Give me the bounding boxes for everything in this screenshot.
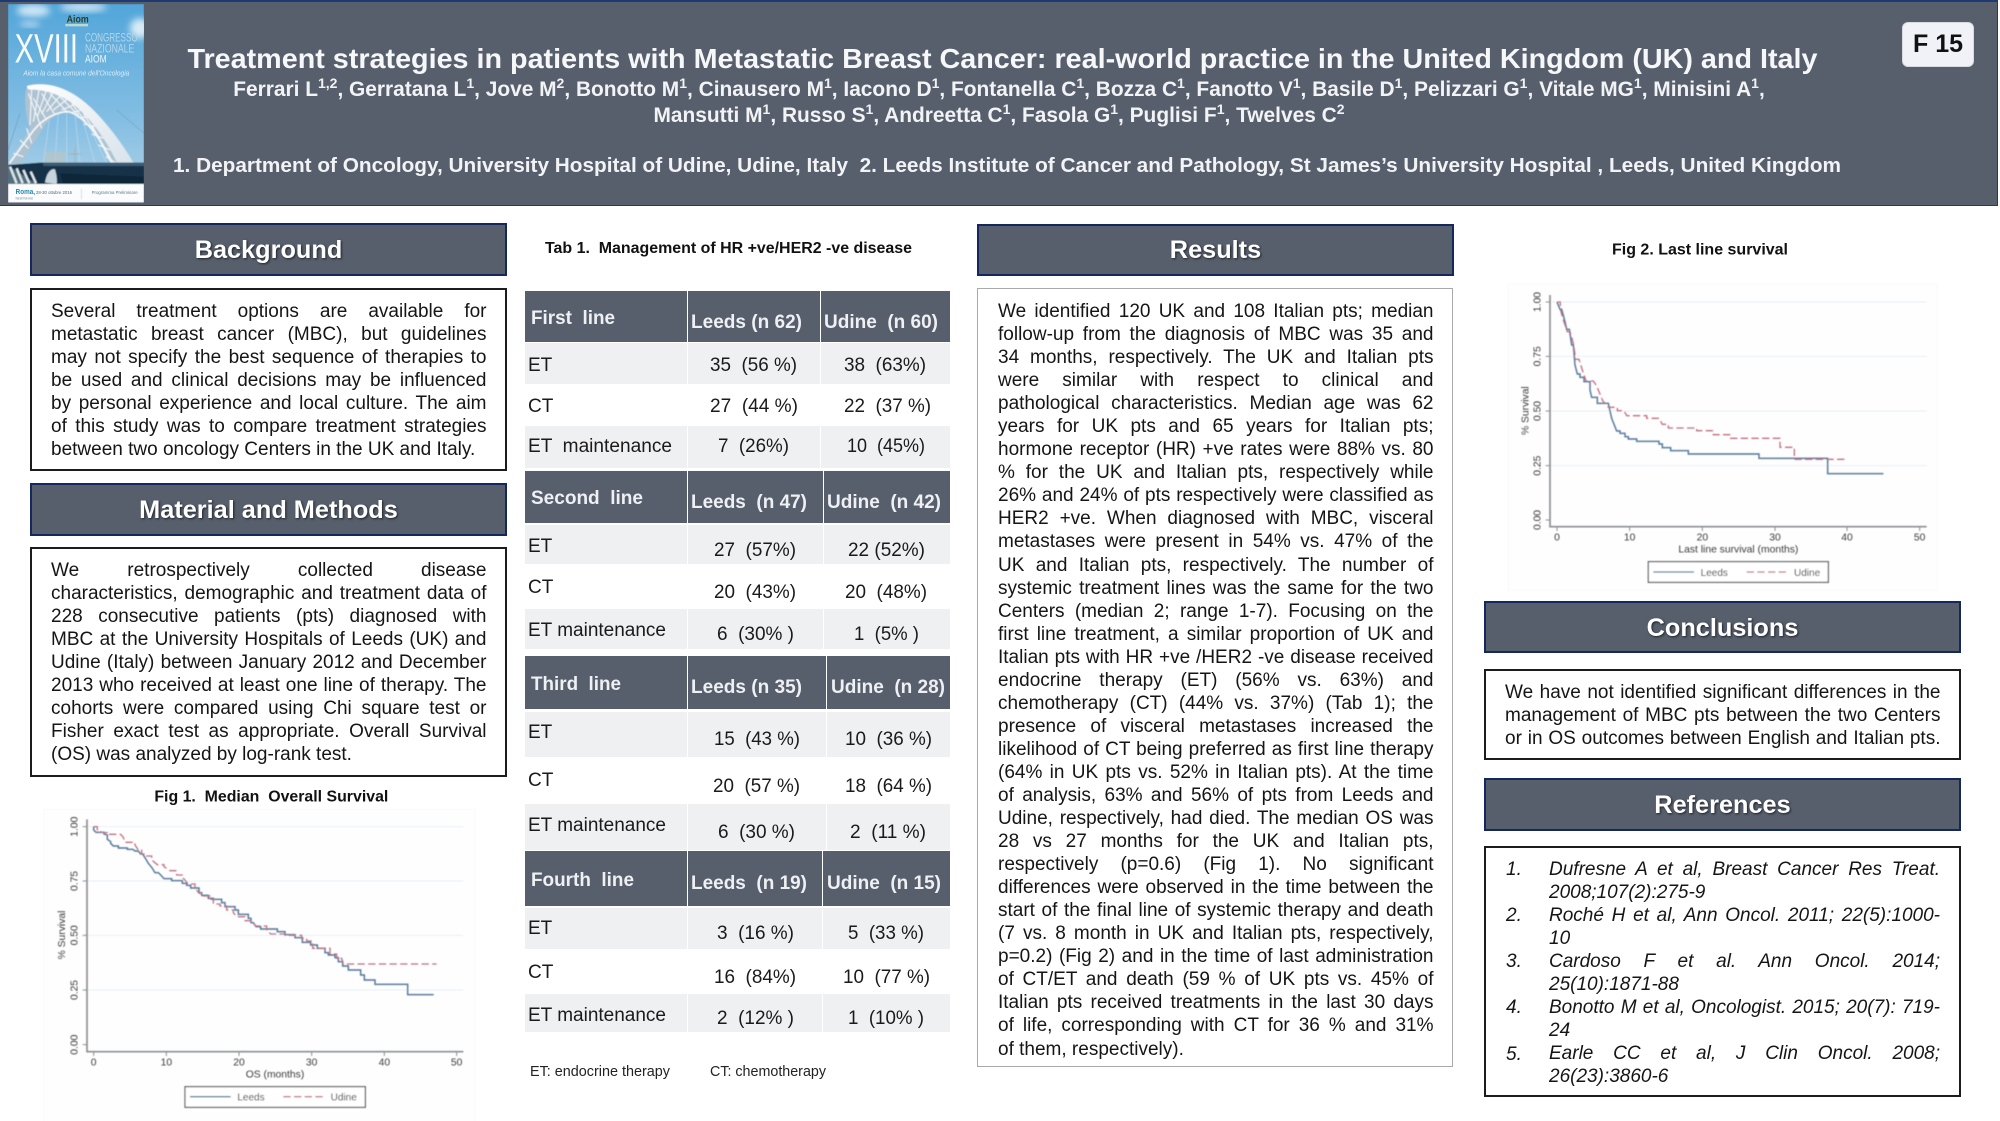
table cell values: 7 (26%)	[718, 436, 789, 457]
table footnote: CT: chemotherapy	[710, 1064, 827, 1080]
panel: methods text: MBC at the University Hospitals of Leeds (UK) and	[51, 629, 486, 650]
figure 1: overall survival chart: 1.00	[69, 816, 80, 837]
panel: references list: Earle CC et al, J Clin Oncol. 2008;	[1549, 1043, 1940, 1064]
panel: references list: Roché H et al, Ann Oncol. 2011; 22(5):1000-	[1549, 905, 1940, 926]
heading: Background	[30, 223, 507, 276]
table cell values: 15 (43 %)	[714, 729, 800, 750]
heading: Results	[977, 224, 1454, 276]
badge: F 15: F 15	[1913, 30, 1963, 58]
panel: results text: % for the UK and Italian pts, respectively while	[998, 462, 1434, 483]
cover text: 28-30 ottobre 2016	[36, 190, 73, 195]
affiliations: 1. Department of Oncology, University Hospital of Udine, Udine, Italy 2. Leeds Institute of Cancer and Pathology, St James’s University Hospital , Leeds, United Kingdom	[173, 155, 1841, 177]
panel: results text: start of the final line of systemic therapy and death	[998, 900, 1434, 921]
cover logo: Aiom	[67, 15, 89, 26]
figure 1: overall survival chart	[56, 789, 464, 1109]
cover text: AIOM	[85, 54, 107, 66]
table header labels: Udine (n 15)	[827, 873, 941, 894]
figure 1: overall survival chart: 0.75	[69, 871, 80, 891]
panel: methods text: Fisher exact test as appropriate. Overall Survival	[51, 721, 486, 742]
panel: references list: 10	[1549, 928, 1570, 949]
figure 2: last line survival chart: 0.50	[1532, 401, 1543, 421]
table header labels: Leeds (n 19)	[691, 873, 807, 894]
table cell values: 2 (12% )	[717, 1008, 794, 1029]
panel: methods text: We retrospectively collected disease	[51, 560, 486, 581]
table cell values: CT	[528, 396, 554, 417]
table cell values: 27 (57%)	[714, 540, 796, 561]
table cell values: 1 (5% )	[854, 624, 919, 645]
panel: results text: metastases were present in 54% vs. 47% of the	[998, 531, 1434, 552]
legend: figure 2	[1648, 562, 1828, 582]
panel: references list	[1484, 846, 1961, 1097]
table 1: management of HR+/HER2- disease	[525, 240, 950, 1080]
table footnote	[530, 1064, 827, 1080]
panel: methods text: characteristics, demographic and treatment data of	[51, 583, 486, 604]
panel: references list: 25(10):1871-88	[1549, 974, 1679, 995]
table cell values: 22 (52%)	[848, 540, 925, 561]
table header labels: Udine (n 28)	[831, 677, 945, 698]
table header labels: Leeds (n 35)	[691, 677, 802, 698]
heading: Material and Methods	[30, 483, 507, 536]
badge: F 15	[1902, 22, 1974, 67]
table cell values: ET	[528, 536, 553, 557]
heading: References: References	[1654, 791, 1791, 819]
panel: methods text: 228 consecutive patients (pts) diagnosed with	[51, 606, 486, 627]
table cell values: 27 (44 %)	[710, 396, 798, 417]
figure 2: last line survival chart: 0.75	[1532, 346, 1543, 366]
figure 2: last line survival chart: Last line survival (months)	[1678, 545, 1798, 556]
table header labels: Leeds (n 62)	[691, 312, 802, 333]
cover text: Marriott Park Hotel	[16, 196, 33, 200]
heading: References	[1484, 778, 1961, 831]
table cell values: 10 (45%)	[847, 436, 925, 457]
bottom strip	[8, 184, 144, 203]
table cell values: 16 (84%)	[714, 967, 796, 988]
panel: methods text: cohorts were compared using Chi square test or	[51, 698, 486, 719]
panel: results text: first line treatment, a similar proportion of UK and	[998, 624, 1434, 645]
heading: Conclusions: Conclusions	[1647, 614, 1798, 642]
panel: results text: (64% in UK pts vs. 52% in Italian pts). At the time	[998, 762, 1434, 783]
figure 2: last line survival chart: 0.25	[1532, 455, 1543, 476]
figure 2: last line survival chart: Fig 2. Last line survival	[1612, 242, 1788, 259]
panel: references list: 1.	[1506, 859, 1522, 880]
panel: results text: were similar with respect to clinical and	[998, 370, 1434, 391]
panel: results text: Italian pts received treatments in the last 30 days	[998, 992, 1434, 1013]
table cell values: ET maintenance	[528, 815, 666, 836]
panel: results text: p=0.2) (Fig 2) and in the time of last administration	[998, 946, 1434, 967]
heading: Material and Methods: Material and Methods	[139, 496, 398, 524]
table cell values: ET	[528, 355, 553, 376]
heading: Conclusions	[1484, 601, 1961, 653]
figure 1: overall survival chart: 20	[233, 1057, 245, 1068]
figure 2: last line survival chart: 20	[1697, 533, 1708, 544]
legend: figure 2: Udine	[1794, 568, 1821, 579]
panel: background text: Several treatment options are available for	[51, 301, 486, 322]
table cell values: 6 (30% )	[717, 624, 794, 645]
panel: results text: of analysis, 63% and 56% of pts from Leeds and	[998, 785, 1434, 806]
figure 2: last line survival chart: 0.00	[1532, 510, 1543, 530]
panel: results text: likelihood of CT being preferred as first line therapy	[998, 739, 1434, 760]
title: Treatment strategies in patients with Metastatic Breast Cancer: real-world practice in the United Kingdom (UK) and Italy	[188, 43, 1818, 74]
table cell values: ET maintenance	[528, 436, 672, 457]
table header labels: Udine (n 60)	[824, 312, 938, 333]
panel: conclusions text: We have not identified significant differences in the	[1505, 682, 1940, 703]
table cell values: CT	[528, 962, 554, 983]
bridge cables	[8, 110, 144, 163]
figure 1: overall survival chart: 0.50	[69, 925, 80, 945]
panel: results text: (7 vs. 8 month in UK and Italian pts, respectively,	[998, 923, 1434, 944]
heading: Results: Results	[1170, 236, 1261, 264]
figure 1: overall survival chart: 40	[379, 1057, 390, 1068]
panel: references list: Bonotto M et al, Oncologist. 2015; 20(7): 719-	[1549, 997, 1940, 1018]
legend: figure 2: Leeds	[1701, 568, 1728, 579]
table cell values: CT	[528, 770, 554, 791]
table title: Tab 1. Management of HR +ve/HER2 -ve disease	[545, 240, 912, 257]
panel: conclusions text: management of MBC pts between the two Centers	[1505, 705, 1940, 726]
panel: results text: 28 vs 27 months for the UK and Italian pts,	[998, 831, 1434, 852]
table cell values: ET maintenance	[528, 620, 666, 641]
table cell values: 6 (30 %)	[718, 822, 795, 843]
panel: results text: differences were observed in the time between the	[998, 877, 1434, 898]
panel: results text: follow-up from the diagnosis of MBC was 35 and	[998, 324, 1434, 345]
panel: results text: 26% and 24% of pts respectively were classified as	[998, 485, 1434, 506]
table header labels	[531, 308, 945, 894]
panel: methods text	[30, 547, 507, 777]
cover text: XVIII	[15, 26, 78, 72]
panel: background text: between two oncology Centers in the UK and Italy.	[51, 439, 475, 460]
panel: results text: of them, respectively).	[998, 1038, 1184, 1060]
figure 2: last line survival chart: 1.00	[1532, 292, 1543, 312]
congress cover image	[8, 4, 144, 203]
panel: results text: HER2 +ve. When diagnosed with MBC, visceral	[998, 508, 1434, 529]
cover text: Aiom la casa comune dell'Oncologia	[22, 69, 129, 78]
figure 1: overall survival chart: 0.00	[69, 1034, 80, 1055]
figure 2: last line survival chart: 40	[1841, 533, 1853, 544]
panel: results text: respectively (p=0.6) (Fig 1). No significant	[998, 854, 1434, 875]
lattice arch body	[8, 86, 123, 165]
panel: references list: 3.	[1506, 951, 1522, 972]
legend: figure 1	[185, 1087, 365, 1107]
panel: results text: endocrine therapy (ET) (56% vs. 63%) and	[998, 670, 1434, 691]
cover text: CONGRESSO	[85, 32, 138, 45]
distant city	[45, 152, 65, 163]
table cell values: 38 (63%)	[844, 355, 926, 376]
cover text	[15, 26, 138, 200]
panel: conclusions text	[1484, 669, 1961, 760]
table cell values: 18 (64 %)	[845, 776, 932, 797]
panel: results text: of life, corresponding with CT for 36 % and 31%	[998, 1015, 1434, 1036]
panel: results text: We identified 120 UK and 108 Italian pts; median	[998, 301, 1434, 322]
table cell values: CT	[528, 577, 554, 598]
panel: conclusions text: or in OS outcomes between English and Italian pts.	[1505, 728, 1940, 749]
figure 1: overall survival chart: 0.25	[69, 980, 80, 1000]
panel: methods text: 2013 who received at least one line of therapy. The	[51, 675, 486, 696]
panel: background text: of this study was to compare treatment strategies	[51, 416, 486, 437]
panel: results text: hormone receptor (HR) +ve rates were 88% vs. 80	[998, 439, 1434, 460]
panel: references list: 4.	[1506, 997, 1522, 1018]
legend: figure 1: Leeds	[237, 1093, 265, 1104]
panel: results text: chemotherapy (CT) (44% vs. 37%) (Tab 1); the	[998, 693, 1434, 714]
heading: Background: Background	[195, 236, 342, 264]
authors: Mansutti M1, Russo S1, Andreetta C1, Fasola G1, Puglisi F1, Twelves C2	[653, 101, 1345, 127]
authors: Ferrari L1,2, Gerratana L1, Jove M2, Bonotto M1, Cinausero M1, Iacono D1, Fontanella C1, Bozza C1, Fanotto V1, Basile D1, Pelizzari G1, Vitale MG1, Minisini A1,	[233, 75, 1765, 101]
table cell values: 35 (56 %)	[710, 355, 797, 376]
table cell values: 2 (11 %)	[850, 822, 926, 843]
panel: results text	[977, 288, 1453, 1067]
panel: background text: metastatic breast cancer (MBC), but guidelines	[51, 324, 486, 345]
panel: references list: 5.	[1506, 1044, 1522, 1064]
panel: references list: Dufresne A et al, Breast Cancer Res Treat.	[1549, 859, 1940, 880]
panel: references list: 2.	[1506, 905, 1522, 926]
figure 2: last line survival chart: 30	[1769, 533, 1781, 544]
road deck	[8, 163, 144, 184]
table cell values: ET maintenance	[528, 1005, 666, 1026]
table header labels: Second line	[531, 488, 643, 509]
panel: references list: Cardoso F et al. Ann Oncol. 2014;	[1549, 951, 1940, 972]
main white arch	[27, 84, 135, 166]
figure 1: overall survival chart: % Survival	[57, 911, 68, 959]
figure 1: overall survival chart: 30	[306, 1057, 318, 1068]
panel: background text	[30, 288, 507, 471]
panel: results text: years for UK pts and 65 years for Italian pts;	[998, 416, 1434, 437]
table cell values: 20 (48%)	[845, 582, 927, 603]
panel: results text: pathological characteristics. Median age was 62	[998, 393, 1434, 414]
legend: figure 1: Udine	[331, 1093, 357, 1104]
table cell values	[528, 355, 932, 1029]
figure 2: last line survival chart: 50	[1914, 533, 1926, 544]
table header labels: Fourth line	[531, 870, 634, 891]
figure 2: last line survival chart: 0	[1554, 533, 1560, 544]
figure 1: overall survival chart: Fig 1. Median Overall Survival	[154, 789, 388, 806]
figure 1: overall survival chart: 0	[91, 1057, 97, 1068]
panel: results text: systemic treatment lines was the same for the two	[998, 578, 1434, 599]
panel: results text: presence of visceral metastases increased the	[998, 716, 1434, 737]
table cell values: 10 (77 %)	[843, 967, 930, 988]
panel: results text: Italian pts with HR +ve /HER2 -ve disease received	[998, 647, 1434, 668]
cover text: Programma Preliminare	[92, 190, 138, 195]
table header labels: Leeds (n 47)	[691, 492, 807, 513]
figure 1: overall survival chart: 10	[161, 1057, 172, 1068]
table cell values: ET	[528, 918, 553, 939]
table cell values: 5 (33 %)	[848, 923, 924, 944]
figure 2: last line survival chart	[1520, 242, 1928, 584]
panel: background text: by personal experience and local culture. The aim	[51, 393, 486, 414]
table header labels: Third line	[531, 674, 621, 695]
panel: results text: 34 months, respectively. The UK and Italian pts	[998, 347, 1434, 368]
panel: methods text: Udine (Italy) between January 2012 and December	[51, 652, 486, 673]
table header labels: First line	[531, 308, 615, 329]
figure 2: last line survival chart: % Survival	[1520, 386, 1531, 435]
panel: background text: be used and clinical decisions may be influenced	[51, 370, 486, 391]
panel: references list: 2008;107(2):275-9	[1549, 882, 1705, 903]
panel: results text: Centers (median 2; range 1-7). Focusing on the	[998, 601, 1434, 622]
panel: references list: 24	[1549, 1020, 1570, 1041]
table cell values: 1 (10% )	[848, 1008, 924, 1029]
table cell values: 3 (16 %)	[717, 923, 794, 944]
panel: results text: UK and Italian pts, respectively. The number of	[998, 555, 1434, 576]
panel: results text: Udine, respectively, had died. The median OS was	[998, 808, 1434, 829]
panel: background text: may not specify the best sequence of therapies to	[51, 347, 486, 368]
table cell values: 20 (43%)	[714, 582, 796, 603]
table cell values: ET	[528, 722, 553, 743]
panel: results text: of CT/ET and death (59 % of UK pts vs. 45% of	[998, 969, 1434, 990]
panel: methods text: (OS) was analyzed by log-rank test.	[51, 744, 352, 765]
table footnote: ET: endocrine therapy	[530, 1064, 671, 1080]
figure 2: last line survival chart: 10	[1624, 533, 1636, 544]
cover text: Roma,	[16, 187, 35, 196]
table cell values: 10 (36 %)	[845, 729, 932, 750]
figure 1: overall survival chart: 50	[451, 1057, 463, 1068]
table cell values: 20 (57 %)	[713, 776, 800, 797]
table cell values: 22 (37 %)	[844, 396, 931, 417]
authors	[233, 75, 1765, 127]
panel: references list: 26(23):3860-6	[1549, 1066, 1668, 1087]
cover text: NAZIONALE	[85, 43, 134, 56]
figure 1: overall survival chart: OS (months)	[246, 1069, 304, 1080]
header banner	[0, 0, 1998, 206]
table header labels: Udine (n 42)	[827, 492, 941, 513]
